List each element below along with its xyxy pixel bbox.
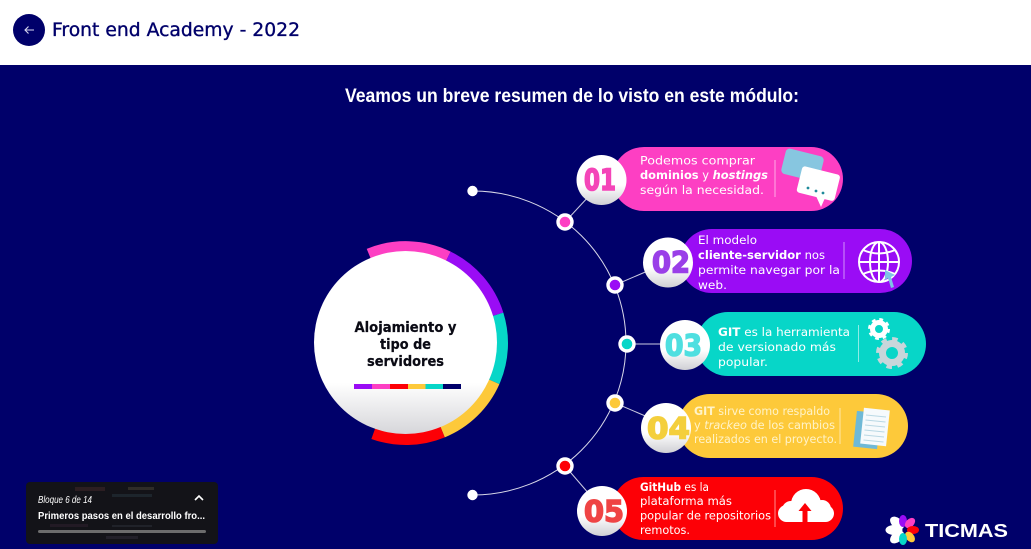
text 02: El modelo — [698, 233, 757, 247]
TICMAS logo — [886, 514, 1008, 546]
card 03 — [660, 312, 926, 376]
central title: Alojamiento y — [354, 320, 456, 336]
text 05 — [640, 480, 771, 537]
white disc — [314, 251, 497, 434]
text 01: según la necesidad. — [640, 183, 764, 197]
number 01: 01 — [584, 163, 616, 197]
connectors — [565, 195, 665, 495]
text 04: realizados en el proyecto. — [694, 432, 837, 446]
icon: cloud upload — [778, 489, 834, 523]
central title: servidores — [367, 354, 444, 370]
number 01 — [576, 155, 626, 205]
text 04: y trackeo de los cambios — [694, 418, 835, 432]
text 02: permite navegar por la — [698, 263, 840, 277]
central circle diagram — [314, 247, 502, 439]
text 05: remotos. — [640, 523, 690, 537]
text 02: cliente-servidor nos — [698, 248, 825, 262]
text 02 — [698, 233, 840, 292]
block label: Bloque 6 de 14 — [38, 495, 92, 506]
text 01: Podemos comprar — [640, 154, 755, 168]
central title: tipo de — [380, 337, 431, 353]
text 04: GIT sirve como respaldo — [694, 404, 830, 418]
header bar — [0, 0, 1031, 65]
card 02 — [643, 229, 912, 293]
colour strip — [354, 384, 461, 389]
number 03 — [660, 320, 710, 370]
card 05 — [577, 477, 843, 540]
text 04 — [694, 404, 837, 446]
code texture — [50, 487, 154, 539]
back button icon — [13, 14, 45, 46]
text 05: plataforma más — [640, 494, 732, 508]
text 03: de versionado más — [718, 340, 836, 354]
text 05: GitHub es la — [640, 480, 709, 494]
logo wordmark: TICMAS — [925, 521, 1008, 541]
text 03: popular. — [718, 355, 768, 369]
text 05: popular de repositorios — [640, 508, 771, 522]
chevron — [195, 496, 203, 500]
number 05: 05 — [584, 494, 624, 528]
text 03 — [718, 325, 850, 369]
number 04 — [641, 403, 691, 453]
central title — [354, 320, 456, 370]
text 01: dominios y hostings — [640, 168, 768, 182]
number 02 — [643, 238, 693, 288]
logo flower — [886, 514, 919, 546]
block title: Primeros pasos en el desarrollo fro... — [38, 511, 205, 522]
text 02: web. — [698, 278, 727, 292]
text 01 — [640, 154, 768, 197]
number 04: 04 — [647, 412, 690, 446]
curved timeline — [467, 186, 665, 500]
segmented ring — [369, 247, 502, 439]
icon: chat bubbles — [780, 148, 841, 207]
icon: gears — [870, 320, 906, 367]
card 04 — [641, 394, 908, 458]
progress bar — [38, 530, 206, 533]
icon: globe — [859, 242, 899, 288]
number 05 — [577, 486, 627, 536]
heading: Veamos un breve resumen de lo visto en este módulo: — [345, 85, 799, 107]
number 02: 02 — [652, 246, 690, 280]
number 03: 03 — [665, 328, 702, 362]
timeline end dots — [467, 186, 478, 500]
course title: Front end Academy - 2022 — [52, 19, 300, 41]
text 03: GIT es la herramienta — [718, 325, 850, 339]
icon: documents — [853, 408, 890, 449]
course progress card — [26, 482, 218, 544]
timeline nodes — [558, 215, 634, 473]
card 01 — [576, 147, 843, 211]
